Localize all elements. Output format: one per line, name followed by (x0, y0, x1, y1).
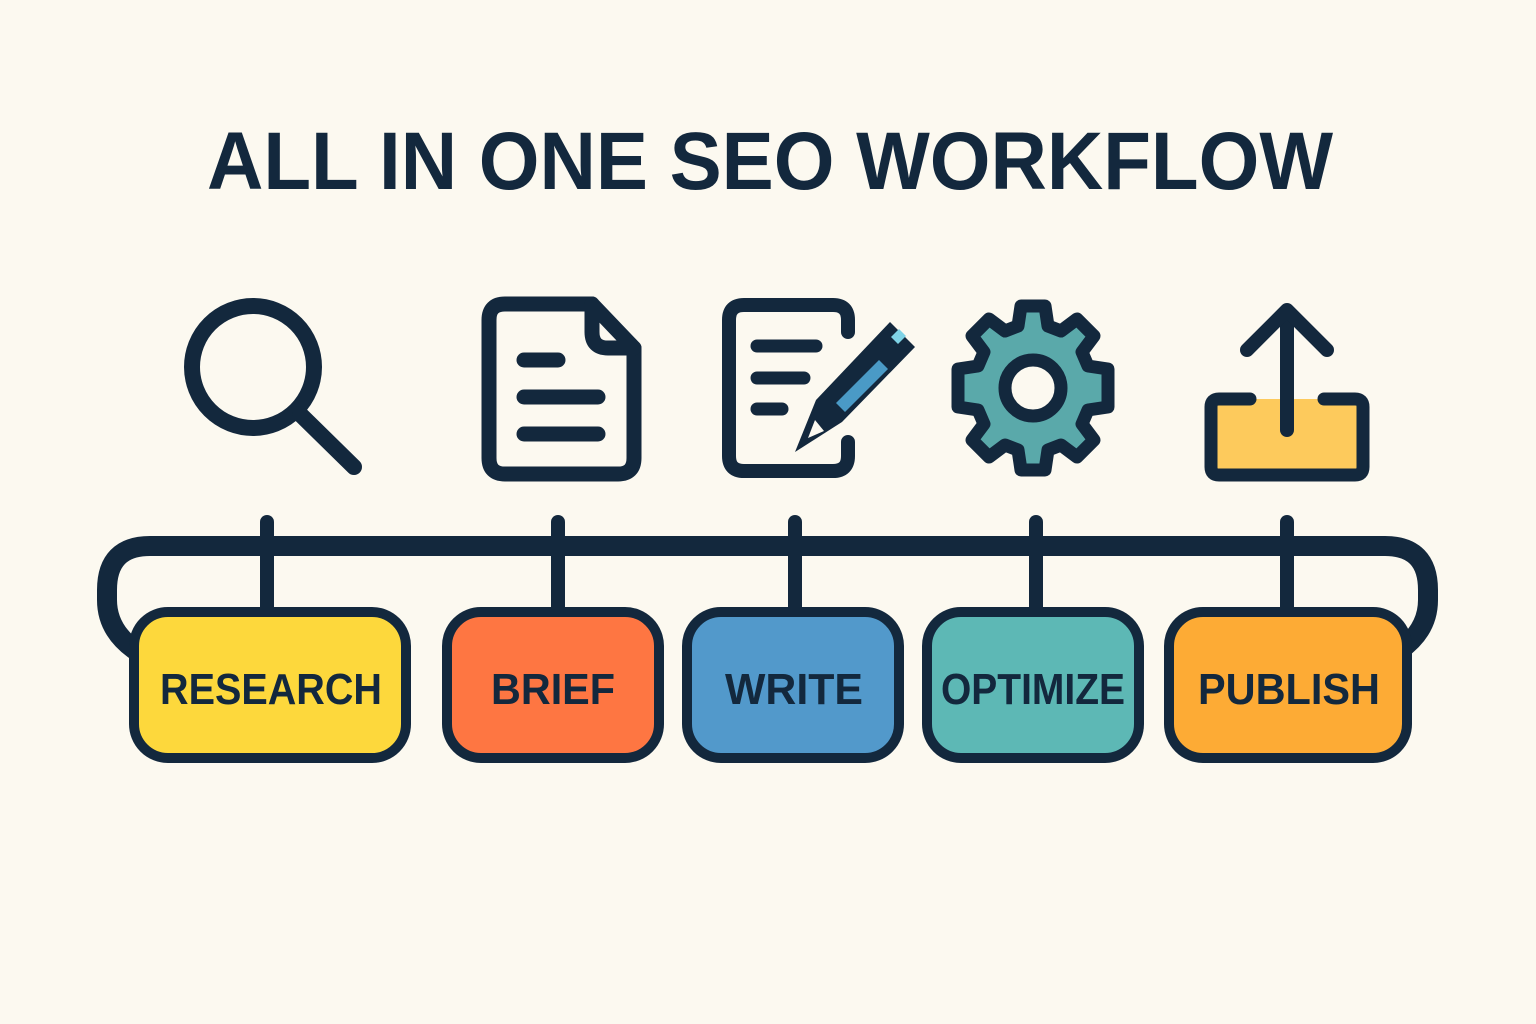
title: ALL IN ONE SEO WORKFLOW (207, 116, 1334, 207)
step: research: RESEARCH (160, 665, 382, 714)
icon: gear (958, 306, 1108, 470)
step: brief (447, 612, 659, 758)
step: write: WRITE (725, 665, 863, 714)
timeline bar (107, 522, 1428, 650)
step: publish (1169, 612, 1407, 758)
step: optimize: OPTIMIZE (941, 665, 1125, 714)
step: optimize (927, 612, 1139, 758)
icon: upload (1211, 310, 1363, 475)
step: research (134, 612, 406, 758)
step: brief: BRIEF (491, 665, 615, 714)
step: write (687, 612, 899, 758)
icon: edit document with pencil (729, 305, 915, 471)
step: publish: PUBLISH (1198, 665, 1380, 714)
icon: magnifier (192, 306, 354, 467)
icon: document (489, 304, 634, 474)
